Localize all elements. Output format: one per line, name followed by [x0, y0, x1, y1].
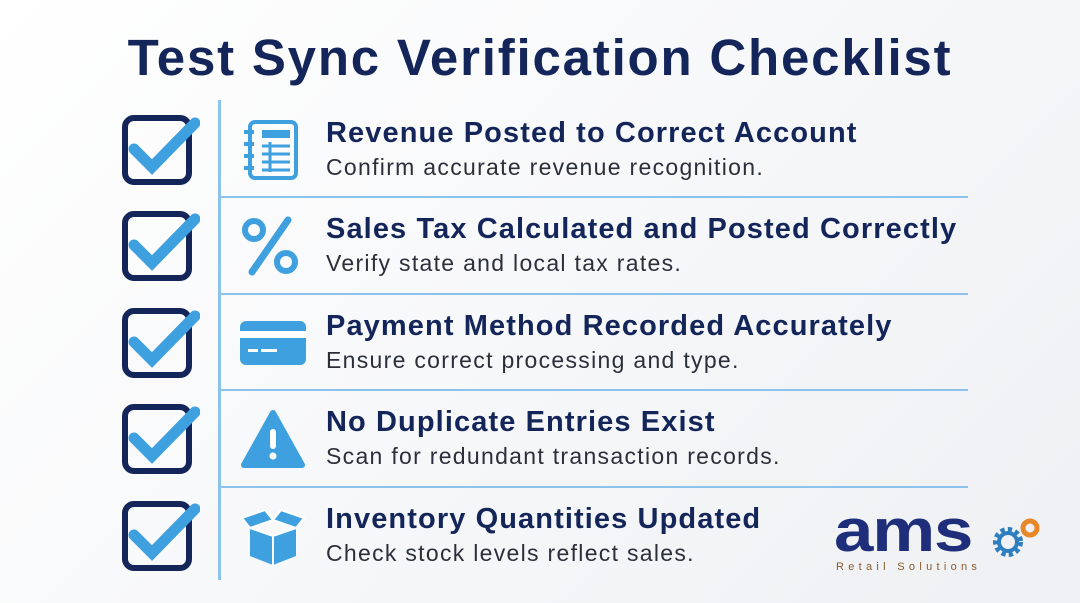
logo: ams retail solutions [834, 497, 1040, 573]
icon: notebook [244, 120, 298, 180]
icon: percent [242, 216, 298, 276]
icon: warning [241, 410, 305, 468]
logo: ams retail solutions: Retail Solutions [836, 561, 981, 573]
heading: No Duplicate Entries Exist [326, 406, 716, 438]
row 1: revenue [122, 115, 858, 185]
checkbox [122, 501, 200, 571]
row 2: sales tax [122, 211, 957, 281]
subtext: Scan for redundant transaction records. [326, 443, 781, 469]
row 4: duplicates [122, 404, 781, 474]
checkbox [122, 308, 200, 378]
checkbox [122, 404, 200, 474]
subtext: Verify state and local tax rates. [326, 250, 682, 276]
heading: Sales Tax Calculated and Posted Correctly [326, 213, 957, 245]
checkbox [122, 115, 200, 185]
heading: Revenue Posted to Correct Account [326, 117, 858, 149]
subtext: Check stock levels reflect sales. [326, 540, 695, 566]
heading: Payment Method Recorded Accurately [326, 310, 893, 342]
subtext: Confirm accurate revenue recognition. [326, 154, 764, 180]
icon: gears [993, 518, 1040, 557]
logo: ams retail solutions: ams [834, 497, 972, 564]
subtext: Ensure correct processing and type. [326, 347, 740, 373]
checkbox [122, 211, 200, 281]
title: Test Sync Verification Checklist [128, 29, 952, 86]
row 3: payment [122, 308, 893, 378]
icon: box [244, 511, 304, 565]
heading: Inventory Quantities Updated [326, 503, 761, 535]
icon: card [240, 321, 306, 365]
row 5: inventory [122, 501, 761, 571]
